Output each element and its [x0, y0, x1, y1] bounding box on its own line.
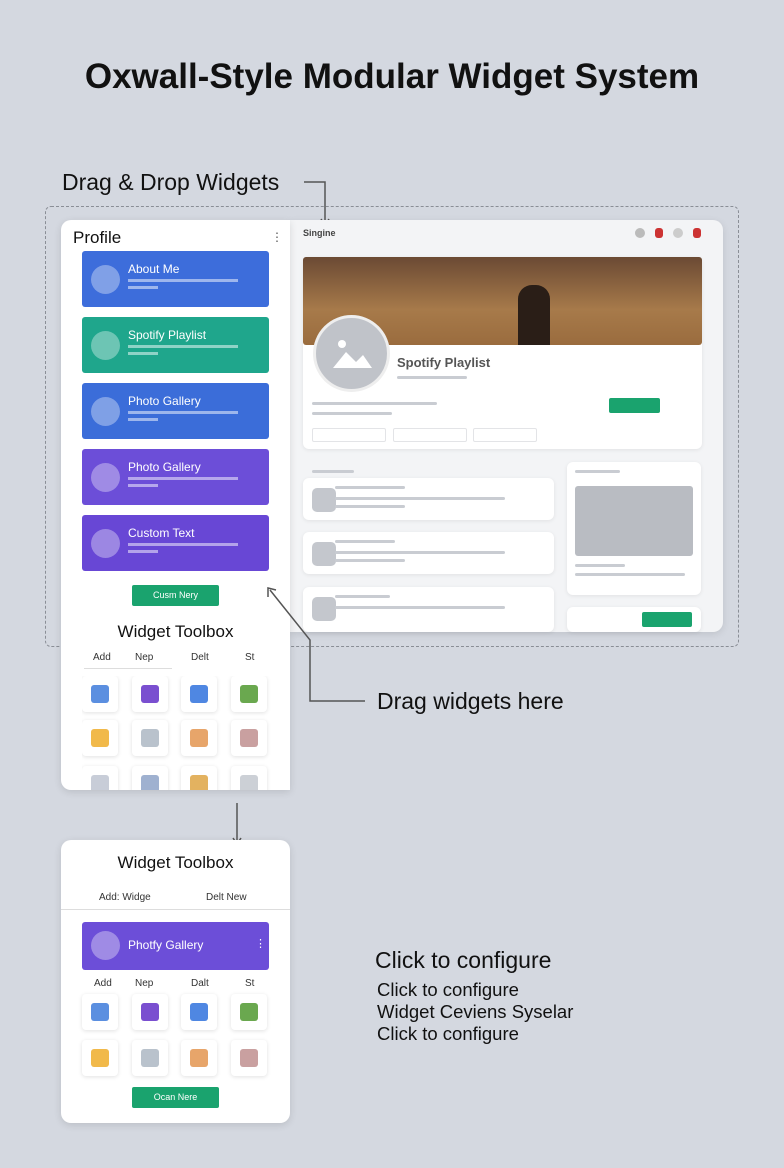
- button: Ocan Nere: [154, 1092, 197, 1102]
- tabs: [84, 652, 254, 669]
- arrow: drag drop connector: [304, 181, 330, 220]
- label: drag & drop widgets: Drag & Drop Widgets: [62, 169, 279, 195]
- arrow: down to toolbox: [232, 803, 242, 840]
- text block: click to configure: Click to configure: [377, 979, 519, 1000]
- tabs: Delt: [191, 652, 209, 663]
- text block: click to configure: [375, 947, 574, 1044]
- heading: Widget Toolbox: [118, 853, 233, 872]
- tabs: Add: Widge: [99, 892, 151, 903]
- button: [132, 1087, 219, 1108]
- selected widget card: Photfy Gallery: [128, 938, 203, 952]
- button: custom new: Cusm Nery: [153, 590, 198, 600]
- widget card: about me: [82, 251, 269, 307]
- tabs: [61, 892, 290, 910]
- widget card: spotify playlist: Spotify Playlist: [128, 328, 206, 342]
- widget card: custom text: Custom Text: [128, 526, 194, 540]
- selected widget card: ⋮: [255, 938, 266, 950]
- text block: click to configure: Widget Ceviens Syselar: [377, 1001, 573, 1022]
- arrow: drag widgets here: [267, 587, 365, 702]
- button: custom new: [132, 585, 219, 606]
- profile header card: [303, 257, 702, 449]
- title: Oxwall-Style Modular Widget System: [85, 57, 699, 96]
- side widget: footer: [567, 607, 701, 632]
- tab labels: Dalt: [191, 978, 209, 989]
- heading: widget toolbox: Widget Toolbox: [118, 622, 233, 641]
- header brand: Singine: [303, 228, 336, 238]
- cover image: [303, 257, 702, 345]
- icon grid: [81, 997, 268, 1078]
- avatar: [313, 315, 390, 392]
- panel: main profile page: [290, 220, 723, 632]
- dashed drop zone: [45, 206, 739, 647]
- profile heading: Profile: [73, 228, 121, 247]
- panel: widget toolbox configure: [61, 840, 290, 1123]
- label: drag widgets here: Drag widgets here: [377, 688, 564, 714]
- tabs: Add: [93, 652, 111, 663]
- tabs: St: [245, 652, 254, 663]
- selected widget card: [82, 922, 269, 970]
- tab labels: Nep: [135, 978, 153, 989]
- tabs: Delt New: [206, 892, 247, 903]
- green button: [609, 398, 660, 413]
- icon grid: [82, 679, 268, 790]
- header icons: [635, 228, 701, 238]
- widget card: photo gallery: [82, 383, 269, 439]
- profile name: Spotify Playlist: [397, 355, 490, 370]
- panel: profile widget column: ⋮: [271, 230, 283, 244]
- widget card: about me: About Me: [128, 262, 179, 276]
- tab labels: St: [245, 978, 254, 989]
- widget card: custom text: [82, 515, 269, 571]
- tab labels: Add: [94, 978, 112, 989]
- text block: click to configure: Click to configure: [375, 947, 551, 973]
- text block: click to configure: Click to configure: [377, 1023, 519, 1044]
- feed widget list: [302, 470, 554, 633]
- tabs row: [312, 428, 386, 442]
- tab labels: [94, 978, 254, 989]
- side widget: image: [567, 462, 701, 595]
- widget card: photo gallery 2: [82, 449, 269, 505]
- widget card: photo gallery 2: Photo Gallery: [128, 460, 201, 474]
- panel: profile widget column: [61, 220, 290, 790]
- widget card: photo gallery: Photo Gallery: [128, 394, 201, 408]
- widget card: spotify playlist: [82, 317, 269, 373]
- tabs: Nep: [135, 652, 153, 663]
